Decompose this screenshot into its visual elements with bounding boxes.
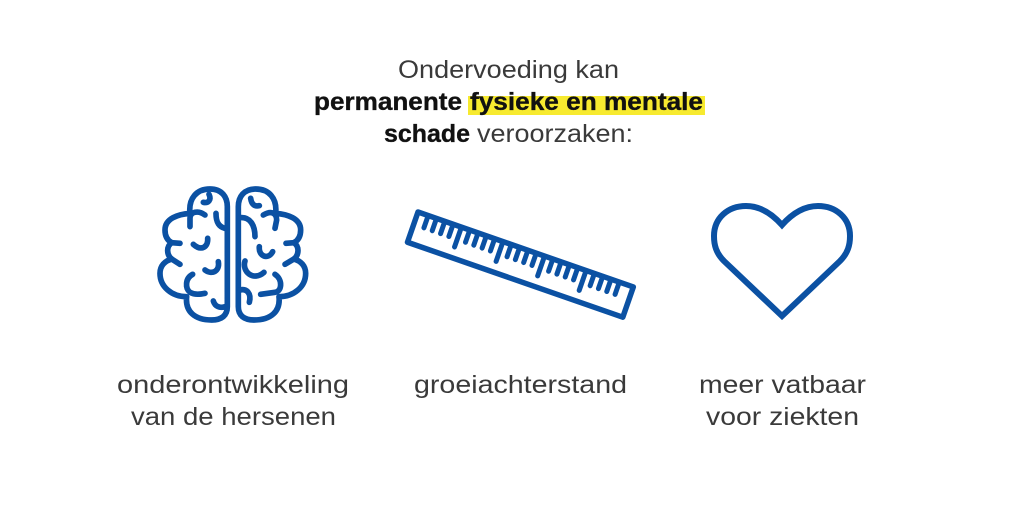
title: [314, 56, 705, 148]
label: brain: van de hersenen: [131, 403, 336, 431]
title line 2: fysieke en mentale: [470, 88, 703, 116]
label: heart: meer vatbaar: [699, 371, 866, 399]
icon: heart: [714, 206, 850, 316]
title line 1: Ondervoeding kan: [398, 56, 619, 84]
title line 2: [314, 88, 703, 116]
label: brain: onderontwikkeling: [117, 371, 349, 399]
yellow highlight: [468, 96, 705, 115]
label: heart: [699, 371, 866, 431]
title line 3: schade: [384, 120, 470, 148]
title line 3: veroorzaken:: [477, 120, 633, 148]
label: brain: [117, 371, 349, 431]
label: heart: voor ziekten: [706, 403, 859, 431]
title line 2: permanente: [314, 88, 462, 116]
icon: ruler: [407, 212, 633, 317]
title line 3: [384, 120, 633, 148]
label: ruler: groeiachterstand: [414, 371, 627, 399]
icon: brain: [160, 189, 306, 320]
